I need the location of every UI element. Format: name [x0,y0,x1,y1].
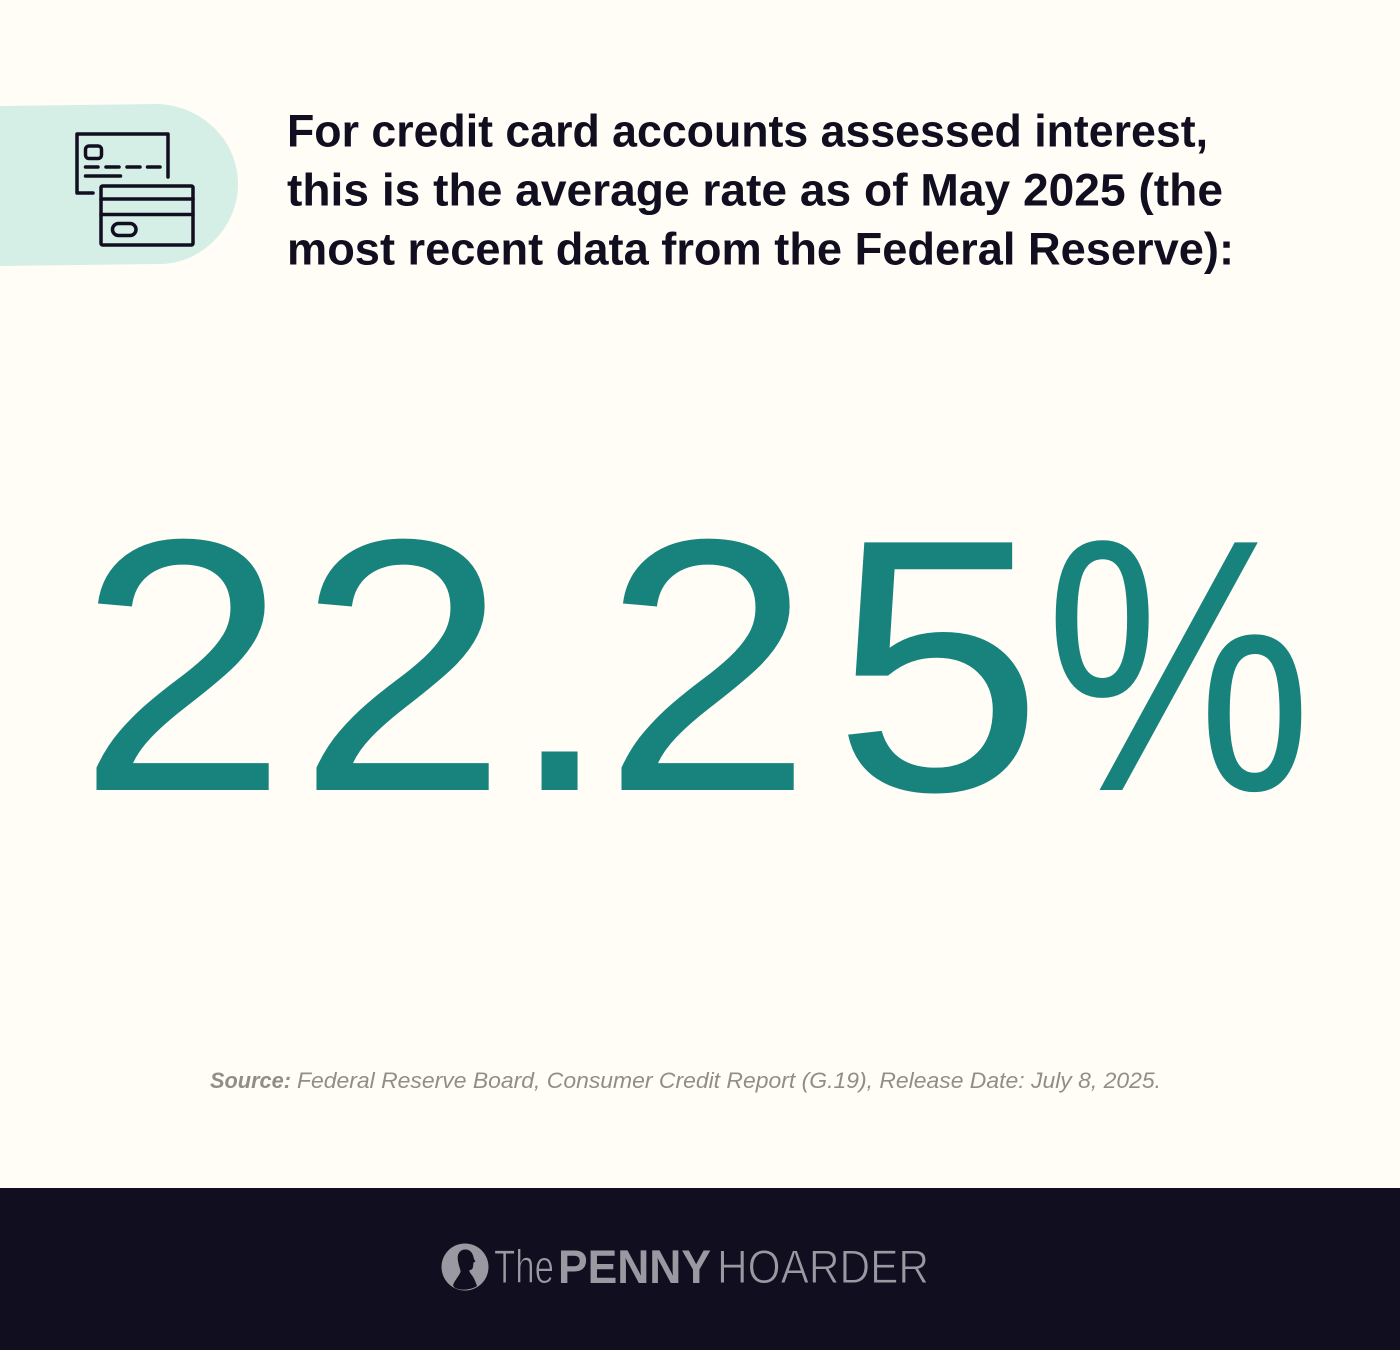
wordmark: PENNY [558,1240,711,1293]
source note: Federal Reserve Board, Consumer Credit Report (G.19), Release Date: July 8, 2025. [297,1068,1161,1093]
heading: most recent data from the Federal Reserve): [287,224,1234,274]
footer logo: The Penny Hoarder [442,1240,929,1293]
big statistic: 22.25%: % [1045,465,1312,867]
icon: penny with silhouette [442,1244,488,1290]
wordmark: HOARDER [717,1240,929,1293]
heading [287,106,1234,274]
wordmark: The [494,1240,554,1293]
big statistic: 22.25%: 22.25 [77,465,1043,867]
footer band [0,1188,1400,1350]
wordmark [494,1240,929,1293]
badge background [0,104,238,266]
source note: Source: [210,1068,291,1093]
icon: two credit cards [77,134,193,245]
icon badge: credit cards [0,104,238,266]
heading: For credit card accounts assessed interest, [287,106,1208,156]
heading: this is the average rate as of May 2025 (the [287,164,1223,216]
